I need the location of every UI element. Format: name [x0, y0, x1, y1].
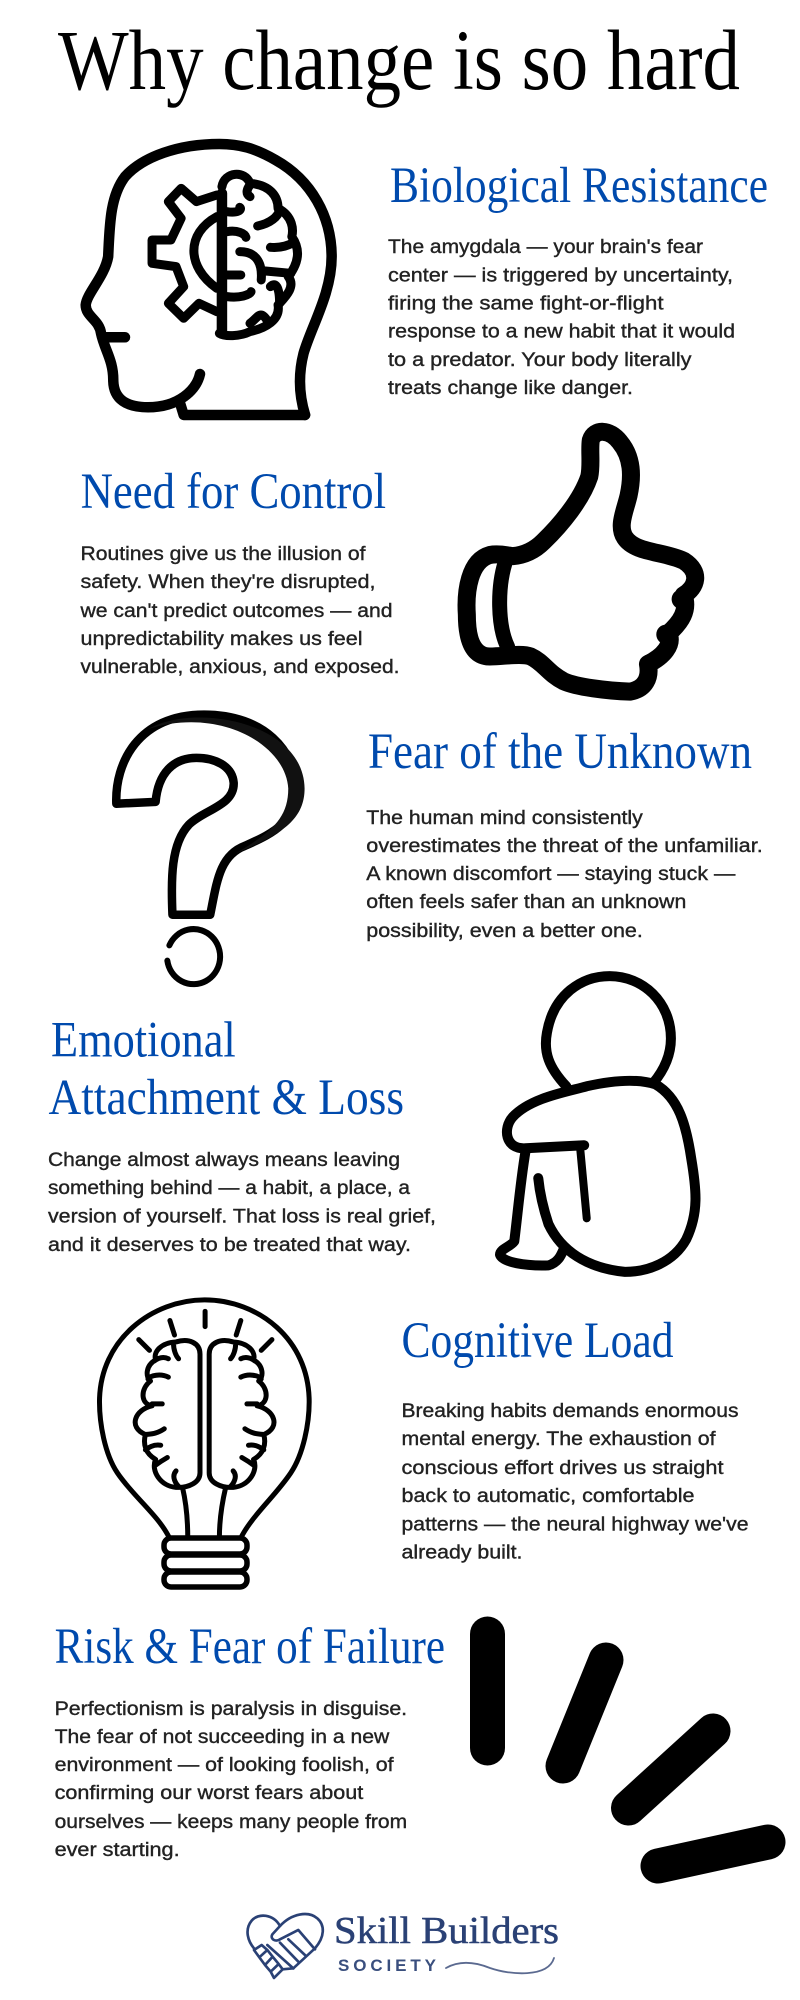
text block	[388, 236, 735, 399]
text block: Breaking habits demands enormous	[402, 1400, 739, 1422]
heading	[48, 1012, 404, 1126]
text block: often feels safer than an unknown	[366, 891, 686, 913]
text block	[366, 807, 763, 942]
heading: Fear of the Unknown	[368, 724, 752, 780]
text block: Perfectionism is paralysis in disguise.	[55, 1698, 407, 1720]
text block: response to a new habit that it would	[388, 320, 735, 342]
text block	[79, 543, 399, 678]
text block: back to automatic, comfortable	[402, 1485, 694, 1507]
panel: fear of the unknown	[116, 715, 763, 984]
text block: version of yourself. That loss is real grief,	[48, 1206, 436, 1228]
icon: light bulb with brain	[99, 1300, 309, 1587]
icon: head with gear and brain	[86, 144, 332, 415]
text block: safety. When they're disrupted,	[80, 571, 376, 593]
icon: seated person hugging knees	[500, 976, 696, 1272]
icon: thumbs up	[467, 432, 695, 692]
text block: we can't predict outcomes — and	[79, 600, 392, 622]
logo swoosh	[446, 1958, 554, 1973]
panel: risk and fear of failure	[55, 1619, 768, 1866]
text block: mental energy. The exhaustion of	[402, 1428, 716, 1450]
panel: need for control	[79, 432, 695, 692]
panel: emotional attachment and loss	[48, 976, 696, 1272]
icon: question mark	[116, 715, 305, 984]
icon: heart handshake	[248, 1914, 323, 1978]
heading: Emotional	[51, 1012, 236, 1068]
text block: ever starting.	[55, 1839, 180, 1861]
text block: Routines give us the illusion of	[80, 543, 366, 565]
text block: possibility, even a better one.	[366, 920, 643, 942]
heading: Cognitive Load	[402, 1313, 674, 1369]
text block	[55, 1698, 407, 1861]
heading: Need for Control	[81, 464, 386, 520]
text block: center — is triggered by uncertainty,	[388, 264, 733, 286]
text block: environment — of looking foolish, of	[55, 1754, 394, 1776]
text block: conscious effort drives us straight	[402, 1457, 724, 1479]
logo tagline: SOCIETY	[338, 1956, 437, 1975]
text block: already built.	[402, 1542, 522, 1564]
text block: Change almost always means leaving	[48, 1149, 400, 1171]
text block: to a predator. Your body literally	[388, 349, 692, 371]
logo wordmark: Skill Builders	[334, 1910, 559, 1952]
text block: The fear of not succeeding in a new	[55, 1726, 390, 1748]
text block: treats change like danger.	[388, 377, 633, 399]
text block: The amygdala — your brain's fear	[388, 236, 703, 258]
text block: ourselves — keeps many people from	[55, 1811, 407, 1833]
panel: biological resistance	[86, 144, 768, 415]
text block: confirming our worst fears about	[55, 1782, 364, 1804]
text block: patterns — the neural highway we've	[402, 1514, 748, 1536]
text block: The human mind consistently	[366, 807, 643, 829]
text block: something behind — a habit, a place, a	[48, 1177, 410, 1199]
heading: Attachment & Loss	[48, 1070, 404, 1126]
text block: firing the same fight-or-flight	[388, 292, 664, 314]
text block: vulnerable, anxious, and exposed.	[80, 656, 400, 678]
heading: Risk & Fear of Failure	[55, 1619, 445, 1675]
text block: unpredictability makes us feel	[80, 628, 362, 650]
text block	[402, 1400, 748, 1564]
text block: A known discomfort — staying stuck —	[366, 863, 736, 885]
panel: cognitive load	[99, 1300, 748, 1587]
icon: radiating burst strokes	[488, 1634, 768, 1866]
text block	[48, 1149, 436, 1256]
text block: and it deserves to be treated that way.	[48, 1234, 411, 1256]
logo: Skill Builders Society	[248, 1910, 559, 1978]
text block: overestimates the threat of the unfamiliar.	[366, 835, 763, 857]
